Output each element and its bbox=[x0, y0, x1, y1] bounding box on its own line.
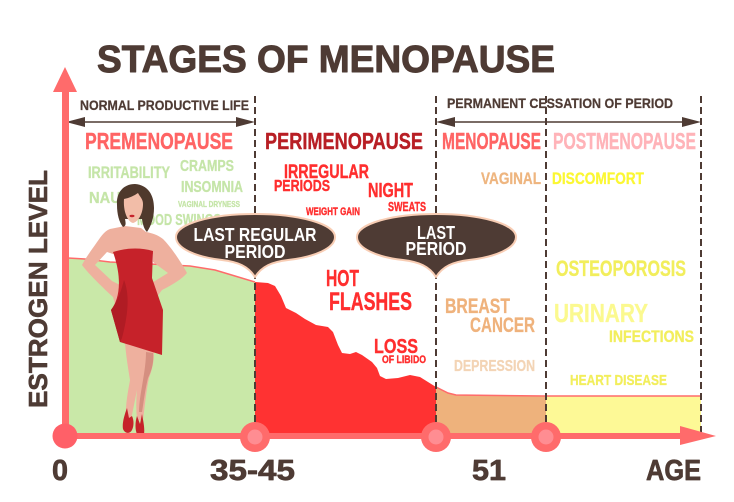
illustration: woman in red dress bbox=[82, 184, 187, 436]
panel: symptom text menopause: BREAST bbox=[445, 295, 510, 318]
lips bbox=[130, 215, 134, 217]
panel: symptom text menopause: DEPRESSION bbox=[454, 358, 535, 375]
area: premenopause bbox=[68, 258, 255, 433]
leg shading bbox=[139, 352, 153, 412]
dress bbox=[111, 248, 163, 355]
marker: age 51 end bbox=[531, 422, 561, 452]
legs bbox=[125, 343, 154, 420]
marker: age 0 bbox=[52, 424, 78, 448]
heading: perimenopause: PERIMENOPAUSE bbox=[265, 128, 423, 154]
label: permanent cessation of period: PERMANENT CESSATION OF PERIOD bbox=[447, 95, 673, 111]
panel: symptom text perimenopause: OF LIBIDO bbox=[382, 354, 426, 366]
y axis arrow bbox=[53, 67, 77, 434]
panel: symptom text menopause: CANCER bbox=[470, 314, 535, 337]
panel: symptom text postmenopause: URINARY bbox=[554, 298, 648, 328]
arms and shoulders bbox=[82, 226, 187, 307]
arrow: permanent cessation span bbox=[436, 117, 701, 127]
panel: symptom text perimenopause: LOSS bbox=[374, 336, 418, 358]
shoes bbox=[123, 408, 144, 436]
tick label: 35-45: 35-45 bbox=[210, 455, 295, 487]
arrow: normal productive life span bbox=[66, 117, 255, 127]
title: STAGES OF MENOPAUSE bbox=[97, 39, 555, 81]
panel: symptom text perimenopause: FLASHES bbox=[329, 288, 412, 316]
panel: symptom text postmenopause: INFECTIONS bbox=[609, 327, 694, 346]
chest bbox=[108, 228, 157, 254]
label: normal productive life: NORMAL PRODUCTIVE LIFE bbox=[80, 98, 249, 113]
panel: symptom text perimenopause: IRREGULAR bbox=[284, 162, 369, 183]
chart: estrogen level area bbox=[68, 258, 701, 433]
callout: last regular period bbox=[176, 214, 335, 277]
panel: symptom text premenopause: CRAMPS bbox=[180, 158, 234, 175]
heading: menopause: MENOPAUSE bbox=[442, 128, 541, 154]
callout: last period: LAST bbox=[417, 223, 455, 243]
marker: last period bbox=[421, 422, 451, 452]
panel: symptom text menopause bbox=[445, 169, 541, 375]
panel: symptom text postmenopause: DISCOMFORT bbox=[552, 169, 644, 188]
callout: last period bbox=[357, 214, 516, 277]
x axis arrow bbox=[65, 426, 716, 445]
area: perimenopause bbox=[255, 282, 436, 433]
axis label: estrogen level: ESTROGEN LEVEL bbox=[23, 170, 53, 408]
area: menopause bbox=[436, 387, 546, 433]
panel: symptom text perimenopause: PERIODS bbox=[274, 178, 330, 195]
panel: symptom text premenopause: NAUSEA bbox=[89, 190, 151, 207]
panel: symptom text premenopause: IRRITABILITY bbox=[88, 163, 170, 182]
callout: last period: PERIOD bbox=[406, 239, 466, 259]
panel: symptom text premenopause: VAGINAL DRYNESS bbox=[178, 199, 240, 209]
dress shading bbox=[111, 280, 128, 342]
hair bbox=[117, 184, 154, 232]
panel: symptom text perimenopause: WEIGHT GAIN bbox=[306, 206, 360, 218]
panel: symptom text perimenopause: HOT bbox=[326, 265, 359, 291]
tick label: 0: 0 bbox=[52, 455, 68, 487]
panel: symptom text perimenopause: SWEATS bbox=[388, 199, 426, 214]
panel: symptom text perimenopause bbox=[274, 162, 426, 366]
callout: last regular period: PERIOD bbox=[224, 242, 286, 262]
axes bbox=[52, 67, 716, 452]
panel: symptom text postmenopause: HEART DISEASE bbox=[570, 372, 667, 389]
area: postmenopause bbox=[546, 396, 701, 433]
face bbox=[124, 193, 143, 223]
heading: premenopause: PREMENOPAUSE bbox=[85, 128, 233, 154]
marker: age 35-45 bbox=[240, 422, 270, 452]
panel: symptom text premenopause: INSOMNIA bbox=[181, 179, 243, 196]
panel: symptom text postmenopause bbox=[552, 169, 694, 389]
callout: last regular period: LAST REGULAR bbox=[194, 225, 316, 245]
panel: symptom text premenopause: MOOD SWINGS bbox=[137, 212, 221, 229]
panel: symptom text perimenopause: NIGHT bbox=[368, 180, 413, 202]
line: estrogen curve bbox=[68, 258, 701, 396]
panel: symptom text postmenopause: OSTEOPOROSIS bbox=[556, 256, 686, 281]
panel: symptom text premenopause bbox=[88, 158, 243, 229]
tick label: 51: 51 bbox=[472, 455, 506, 487]
panel: symptom text menopause: VAGINAL bbox=[481, 169, 541, 188]
tick label: age: AGE bbox=[646, 455, 701, 487]
